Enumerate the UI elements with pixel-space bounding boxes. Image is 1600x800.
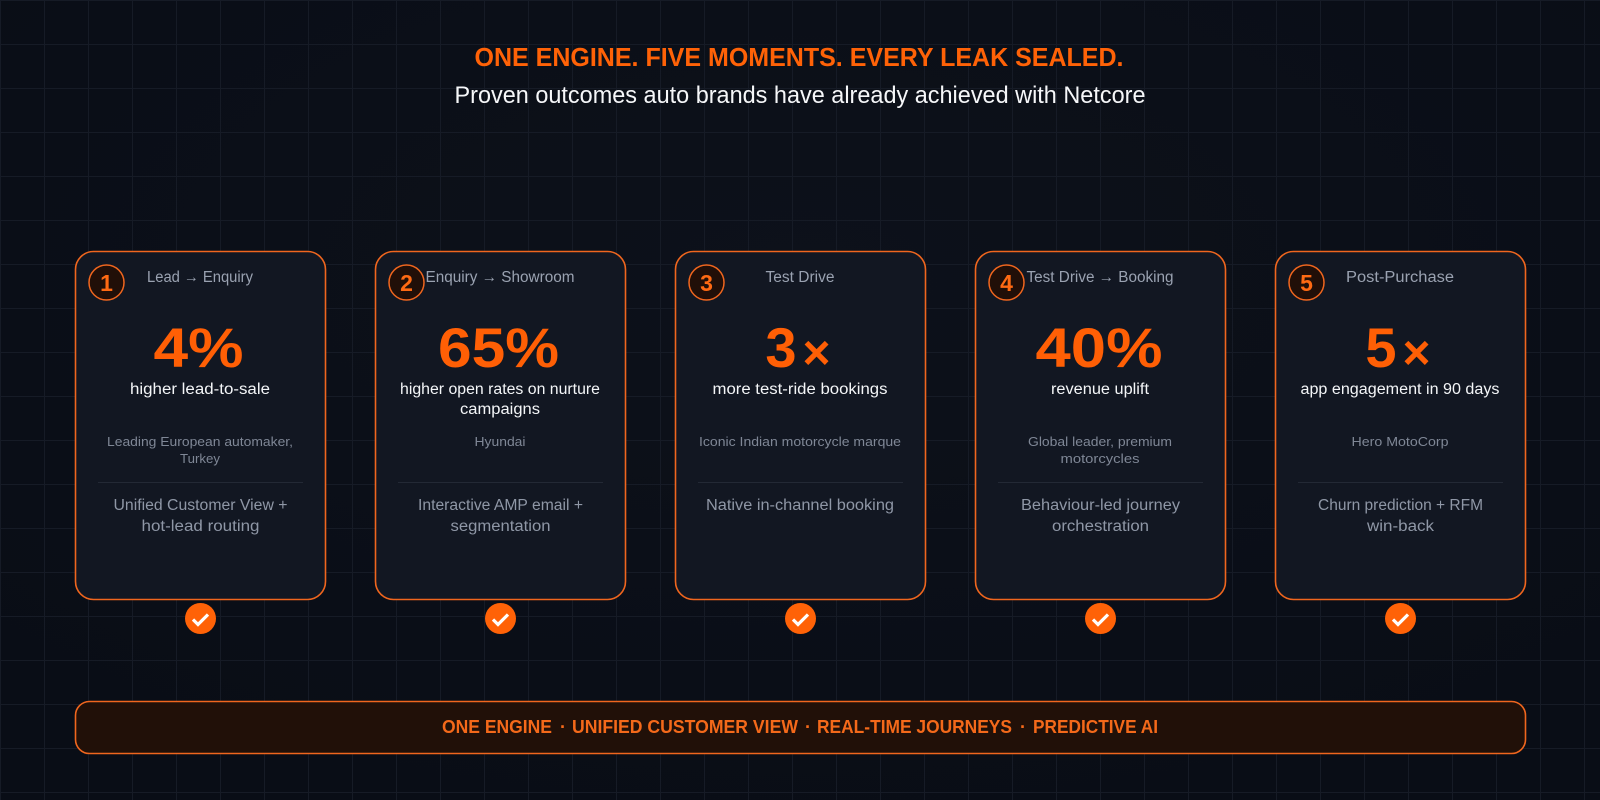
tactic: Interactive AMP email + [418, 497, 583, 514]
metric description: campaigns [460, 401, 540, 418]
panel: card 2 enquiry to showroom [376, 252, 626, 600]
client: Hero MotoCorp [1352, 434, 1448, 449]
icon: check 1 [185, 603, 216, 634]
panel: card 1 lead to enquiry [76, 252, 326, 600]
banner [76, 702, 1526, 754]
tactic [114, 497, 288, 535]
icon: check 2 [485, 603, 516, 634]
stage label: Test Drive → Booking [1026, 269, 1174, 286]
stage label: Enquiry → Showroom [426, 269, 574, 286]
banner: UNIFIED CUSTOMER VIEW [572, 717, 798, 737]
banner: · [805, 717, 811, 737]
metric: 3 [765, 316, 797, 379]
subtitle: Proven outcomes auto brands have already achieved with Netcore [454, 82, 1146, 109]
icon: check 5 [1385, 603, 1416, 634]
metric description [400, 381, 600, 418]
stage label: Lead → Enquiry [147, 269, 253, 286]
metric: 4% [154, 316, 244, 379]
tactic: orchestration [1052, 518, 1149, 535]
client: Leading European automaker, [107, 434, 293, 449]
stage label: Test Drive [766, 269, 834, 286]
client: motorcycles [1060, 451, 1140, 466]
title: ONE ENGINE. FIVE MOMENTS. EVERY LEAK SEALED. [474, 42, 1124, 72]
stage label: Post-Purchase [1346, 269, 1454, 286]
panel: card 4 test drive to booking [976, 252, 1226, 600]
badge 1: 1 [100, 270, 113, 296]
metric description: higher lead-to-sale [130, 381, 270, 398]
client [1028, 434, 1172, 466]
metric description: revenue uplift [1051, 381, 1150, 398]
panel: card 3 test drive [676, 252, 926, 600]
tactic: Native in-channel booking [706, 497, 894, 514]
metric: 5 [1365, 316, 1397, 379]
badge 3: 3 [700, 270, 713, 296]
tactic: segmentation [450, 518, 550, 535]
tactic: hot-lead routing [142, 518, 260, 535]
client: Turkey [180, 451, 221, 466]
tactic [418, 497, 583, 535]
tactic: Churn prediction + RFM [1318, 497, 1483, 514]
badge 2: 2 [400, 270, 413, 296]
badge 3 [689, 265, 724, 300]
banner: REAL-TIME JOURNEYS [817, 717, 1012, 737]
tactic: Behaviour-led journey [1021, 497, 1180, 514]
badge 5 [1289, 265, 1324, 300]
banner: ONE ENGINE [442, 717, 552, 737]
metric: × [802, 327, 831, 380]
metric: × [1402, 327, 1431, 380]
icon: check 3 [785, 603, 816, 634]
panel: card 5 post-purchase [1276, 252, 1526, 600]
banner: · [560, 717, 566, 737]
metric description: more test-ride bookings [712, 381, 888, 398]
client: Global leader, premium [1028, 434, 1172, 449]
banner: · [1020, 717, 1026, 737]
badge 5: 5 [1300, 270, 1313, 296]
banner: PREDICTIVE AI [1033, 717, 1158, 737]
client [107, 434, 293, 466]
client: Hyundai [474, 434, 526, 449]
badge 2 [389, 265, 424, 300]
tactic: win-back [1366, 518, 1434, 535]
metric description: higher open rates on nurture [400, 381, 600, 398]
metric: 65% [438, 316, 559, 379]
metric description: app engagement in 90 days [1300, 381, 1500, 398]
tactic [1021, 497, 1180, 535]
icon: check 4 [1085, 603, 1116, 634]
tactic [1318, 497, 1483, 535]
metric: 40% [1036, 316, 1162, 379]
tactic: Unified Customer View + [114, 497, 288, 514]
client: Iconic Indian motorcycle marque [699, 434, 901, 449]
badge 4 [989, 265, 1024, 300]
badge 1 [89, 265, 124, 300]
badge 4: 4 [1000, 270, 1013, 296]
